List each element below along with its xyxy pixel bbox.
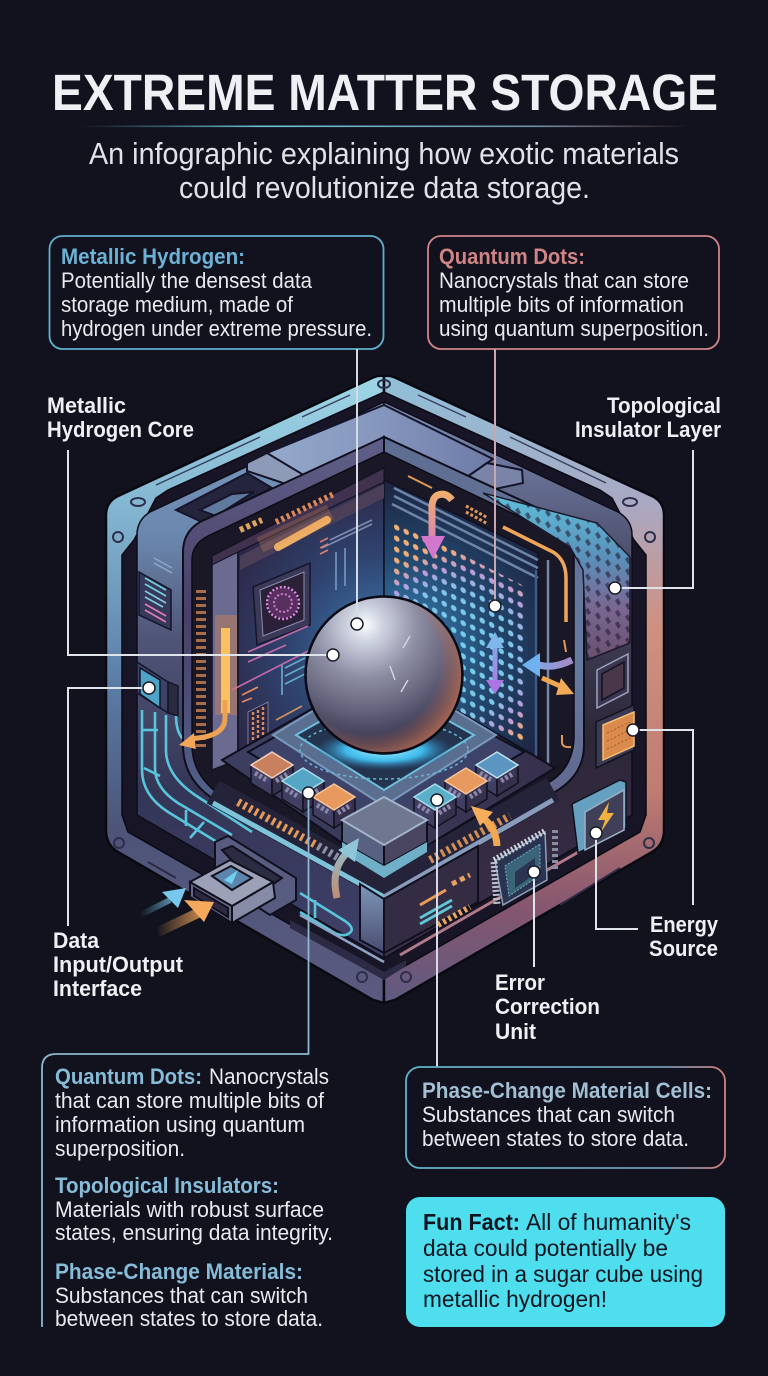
- inner frame: [183, 437, 584, 885]
- right small module: [597, 654, 628, 708]
- label: energy source: Energy: [650, 912, 719, 937]
- front block lights: [420, 875, 470, 925]
- orange curved arrow right: [471, 806, 497, 846]
- panel: materials summary: Phase-Change Materials:: [55, 1259, 303, 1284]
- inner panels left and right: [137, 402, 384, 958]
- callout: quantum dots: multiple bits of information: [439, 292, 684, 317]
- label: metallic hydrogen core: [47, 393, 339, 661]
- callout: quantum dots: [428, 236, 719, 349]
- label: topological insulator layer: Insulator Layer: [575, 417, 721, 442]
- pink downward arrow: [421, 494, 452, 559]
- panel: materials summary: Substances that can switch: [55, 1283, 308, 1308]
- subtitle: An infographic explaining how exotic materials: [89, 136, 679, 171]
- metallic hydrogen sphere: [306, 596, 462, 754]
- subtitle: [89, 136, 679, 205]
- lightning battery: [572, 780, 626, 853]
- callout: phase-change material cells: [406, 794, 725, 1168]
- panel: materials summary: Topological Insulators:: [55, 1173, 279, 1198]
- panel: materials summary: states, ensuring data integrity.: [55, 1220, 333, 1245]
- glow ring beneath sphere: [300, 721, 468, 779]
- label: error correction unit: [495, 866, 600, 1044]
- monitor panel with pink rings: [253, 563, 310, 645]
- callout: metallic hydrogen: [50, 236, 384, 349]
- callout: fun fact: Fun Fact:: [423, 1209, 520, 1235]
- callout: fun fact: All of humanity's: [526, 1209, 691, 1235]
- label: data input output interface: [53, 682, 184, 1001]
- subtitle: could revolutionize data storage.: [179, 170, 590, 205]
- callout: fun fact: metallic hydrogen!: [423, 1286, 607, 1312]
- well interior: [192, 452, 574, 880]
- lower front block: [290, 828, 620, 980]
- callout: fun fact: stored in a sugar cube using: [423, 1261, 703, 1287]
- label: data input output interface: Interface: [53, 976, 142, 1001]
- label: error correction unit: Correction: [495, 994, 600, 1019]
- left wall vent slats: [196, 590, 206, 750]
- orange channel line: [408, 476, 571, 747]
- title: EXTREME MATTER STORAGE: [52, 64, 718, 121]
- right wall stripes: [392, 488, 548, 770]
- grey centre block: [342, 797, 427, 878]
- panel: materials summary: [42, 787, 333, 1331]
- blue curved arrow: [522, 653, 572, 677]
- label: data input output interface: Input/Output: [53, 952, 184, 977]
- panel: materials summary: between states to store data.: [55, 1306, 323, 1331]
- orange arrow on left: [179, 700, 225, 749]
- top vent strip left: [212, 468, 384, 570]
- inner light pillar left: [212, 546, 238, 770]
- platform cubes row: [251, 752, 518, 828]
- label: energy source: [590, 724, 719, 961]
- grid readout chip: [248, 702, 268, 750]
- cyan circuit traces: [142, 710, 352, 935]
- platform slab: [222, 668, 555, 872]
- double headed arrow: [486, 632, 504, 694]
- top lid plate: [176, 405, 523, 522]
- socket plate: [273, 668, 496, 806]
- cube outer rim: [106, 376, 664, 1003]
- error correction microchip: [494, 830, 555, 905]
- label: error correction unit: Error: [495, 970, 545, 995]
- callout: metallic hydrogen: Potentially the densest data: [61, 268, 313, 293]
- data port chip: [137, 662, 178, 716]
- leader: quantum dots box to matrix: [489, 349, 501, 612]
- callout: quantum dots: Quantum Dots:: [439, 244, 585, 269]
- hex insulator layer: [483, 493, 630, 660]
- panel: materials summary: Quantum Dots:: [55, 1064, 202, 1089]
- callout: phase-change material cells: Phase-Change Material Cells:: [422, 1078, 712, 1103]
- input arrows: [140, 888, 214, 932]
- quantum dot matrix: [394, 520, 524, 744]
- label: error correction unit: Unit: [495, 1019, 537, 1044]
- callout: metallic hydrogen: Metallic Hydrogen:: [61, 244, 245, 269]
- panel: materials summary: Nanocrystals: [209, 1064, 329, 1089]
- label: topological insulator layer: Topological: [607, 393, 721, 418]
- label: data input output interface: Data: [53, 928, 100, 953]
- callout: quantum dots: Nanocrystals that can store: [439, 268, 689, 293]
- callout: phase-change material cells: between states to store data.: [422, 1126, 689, 1151]
- label: metallic hydrogen core: Metallic: [47, 393, 126, 418]
- left back wall: [238, 480, 384, 770]
- dark inset channel: [122, 392, 646, 978]
- label: topological insulator layer: [575, 393, 721, 594]
- grey curved arrow: [335, 838, 359, 898]
- illustration: isometric storage cube: [106, 376, 664, 1003]
- callout: metallic hydrogen: hydrogen under extreme pressure.: [61, 316, 372, 341]
- IO connector plug: [190, 836, 296, 923]
- right back wall: [384, 480, 538, 770]
- panel: materials summary: Materials with robust surface: [55, 1197, 324, 1222]
- callout: quantum dots: using quantum superposition.: [439, 316, 709, 341]
- panel: materials summary: that can store multiple bits of: [55, 1088, 325, 1113]
- orange short arrow: [542, 678, 574, 695]
- label: metallic hydrogen core: Hydrogen Core: [47, 417, 194, 442]
- left side status panel: [139, 558, 172, 630]
- orange energy cell: [596, 705, 634, 768]
- callout: phase-change material cells: Substances that can switch: [422, 1102, 675, 1127]
- panel: materials summary: information using quantum: [55, 1112, 305, 1137]
- leader: metallic hydrogen box to sphere: [351, 349, 363, 630]
- callout: metallic hydrogen: storage medium, made of: [61, 292, 294, 317]
- rim screws and notches: [113, 380, 655, 982]
- left wall readout lines: [232, 520, 372, 720]
- callout: fun fact: [406, 1197, 725, 1327]
- glowing yellow bar: [215, 615, 237, 715]
- panel: materials summary: superposition.: [55, 1136, 185, 1161]
- base rails: [213, 789, 553, 897]
- callout: fun fact: data could potentially be: [423, 1235, 668, 1261]
- label: energy source: Source: [649, 936, 718, 961]
